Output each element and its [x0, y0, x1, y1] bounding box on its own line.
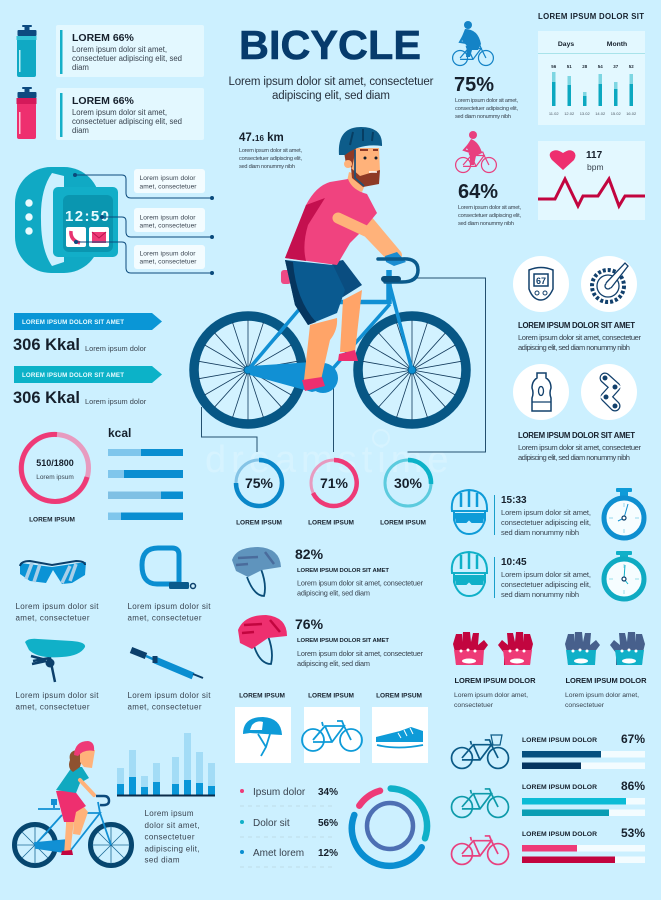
row: cruiser bike 86 percent: 86% [621, 779, 645, 793]
bike frame [248, 270, 412, 374]
distance stat [239, 132, 302, 170]
icon: rider face blue [452, 490, 487, 534]
callout 1: amet, consectetuer [140, 184, 197, 190]
row: road bike 53 percent [452, 826, 645, 864]
card: lorem 66 second: LOREM 66% [72, 95, 135, 107]
callout 2: amet, consectetuer [140, 222, 197, 230]
icon: stopwatch teal [604, 551, 644, 599]
rider stat 10:45: sed diam nonummy nibh [501, 590, 579, 599]
icon: teal bike [452, 789, 508, 817]
stat: blue cyclist 75 percent: sed diam nonummy nibh [455, 114, 511, 120]
icon: bike computer: 67 [536, 276, 546, 286]
panel: bar chart days month: 14.02 [595, 111, 606, 116]
callout 3 [134, 245, 205, 269]
panel: bar chart days month: 54 [598, 64, 603, 69]
front leg [304, 318, 337, 380]
stat: pink cyclist 64 percent: Lorem ipsum dolor sit amet, [458, 205, 521, 211]
helmet [339, 127, 382, 155]
glove [385, 252, 406, 266]
kcal bars [108, 426, 183, 520]
card: lorem 66: consectetuer adipiscing elit, sed [72, 54, 182, 63]
progress ring: 75 percent: 75% [245, 475, 274, 491]
skirt [56, 790, 86, 822]
gloves: teal: consectetuer [565, 702, 605, 709]
callout dots [73, 173, 214, 275]
bar chart description: consectetuer [144, 832, 195, 842]
callout 3: Lorem ipsum dolor [140, 250, 196, 258]
icon: teal gloves [565, 632, 645, 665]
bar chart description [144, 809, 200, 864]
item: bike pump: amet, consectetuer [128, 702, 202, 712]
item: bike pump [128, 650, 211, 712]
legend: Amet lorem [253, 848, 304, 859]
stat: 306 kkal second: Lorem ipsum dolor [85, 397, 147, 406]
stat: 306 kkal: 306 Kkal [13, 336, 80, 354]
icon: bottle outline [513, 364, 569, 420]
panel: teal bottle stat [16, 25, 204, 77]
gloves: teal: LOREM IPSUM DOLOR [566, 676, 647, 685]
donut label: LOREM IPSUM [29, 516, 75, 524]
back arm [366, 218, 397, 255]
panel: bar chart days month: 37 [613, 64, 619, 69]
bar chart description: Lorem ipsum [144, 809, 194, 818]
gear tiles labels: LOREM IPSUM [376, 692, 422, 700]
icon: bike chain [581, 364, 637, 420]
stat: pink helmet 76 percent [238, 615, 424, 668]
icon: rider face teal [452, 552, 487, 596]
stat: blue helmet 82 percent: Lorem ipsum dolor sit amet, consectetuer [297, 578, 424, 588]
stat: 306 kkal second: 306 Kkal [13, 389, 80, 407]
subtitle [228, 76, 434, 102]
head [344, 148, 380, 187]
stat: pink helmet 76 percent: Lorem ipsum dolor sit amet, consectetuer [297, 649, 424, 658]
card: lorem 66: Lorem ipsum dolor sit amet, [72, 45, 167, 54]
description: Lorem ipsum dolor sit amet, consectetuer [518, 443, 641, 452]
card: lorem 66 second: Lorem ipsum dolor sit amet, [72, 108, 167, 117]
tile: shoe [372, 707, 428, 763]
card: lorem 66: LOREM 66% [72, 32, 135, 44]
ring labels: LOREM IPSUM [308, 520, 354, 526]
panel: bar chart days month: 56 [551, 64, 557, 69]
rider stat 10:45: consectetuer adipiscing elit, [501, 580, 591, 589]
front arm [338, 218, 393, 258]
distance stat: sed diam nonummy nibh [239, 164, 295, 170]
small bar chart [117, 733, 215, 796]
ring labels: LOREM IPSUM [380, 520, 426, 526]
face [80, 750, 95, 768]
bar chart description: sed diam [144, 856, 180, 864]
gloves: pink: LOREM IPSUM DOLOR [454, 676, 536, 685]
chainring [308, 363, 338, 393]
rider stat 10:45: Lorem ipsum dolor sit amet, [501, 570, 591, 579]
row: cruiser bike 86 percent: LOREM IPSUM DOLOR [522, 784, 597, 791]
card: lorem 66 second [56, 88, 204, 140]
icon: chainring crank [581, 256, 637, 312]
stat: pink helmet 76 percent: LOREM IPSUM DOLOR SIT AMET [297, 638, 389, 644]
stat: pink cyclist 64 percent: 64% [458, 181, 498, 203]
panel: bar chart days month: 13.02 [580, 111, 590, 116]
description: adipiscing elit, sed diam nonummy nibh [518, 453, 630, 462]
icon: pink cyclist [456, 131, 496, 172]
donut: 510 of 1800: Lorem ipsum [36, 474, 74, 481]
main illustration: cyclist on bicycle [194, 127, 486, 452]
callout 2 [134, 208, 205, 232]
saddle [281, 270, 291, 284]
icon: bike pump [131, 650, 203, 678]
handlebar [96, 796, 109, 805]
gear tiles labels: LOREM IPSUM [239, 692, 285, 700]
bar chart description: adipiscing elit, [144, 844, 200, 854]
icon: bike lock [142, 548, 196, 589]
front wheel [358, 316, 466, 424]
multi-ring donut chart [352, 788, 427, 866]
stat: pink helmet 76 percent: adipiscing elit, sed diam [297, 659, 370, 668]
shirt [285, 179, 377, 265]
row: basket bike 67 percent [452, 732, 645, 769]
ring labels: LOREM IPSUM [236, 520, 282, 526]
title: BICYCLE [239, 22, 421, 68]
row: cruiser bike 86 percent [452, 779, 645, 817]
progress ring: 75 percent [236, 460, 282, 506]
arm [80, 780, 94, 795]
chainstay [250, 362, 320, 392]
panel: heart rate: bpm [587, 162, 604, 172]
stat: blue helmet 82 percent: LOREM IPSUM DOLOR SIT AMET [297, 568, 389, 574]
handlebar [378, 259, 418, 282]
stat: blue helmet 82 percent [232, 546, 424, 598]
banner: blue [14, 313, 162, 330]
wheels [14, 824, 132, 866]
icon: navy bike [452, 735, 508, 768]
row: basket bike 67 percent: 67% [621, 732, 645, 746]
legend: Ipsum dolor [253, 787, 306, 798]
gloves: pink: Lorem ipsum dolor amet, [454, 692, 528, 699]
item: sunglasses: Lorem ipsum dolor sit [16, 602, 99, 611]
item: saddle: Lorem ipsum dolor sit [16, 691, 99, 700]
heading: LOREM IPSUM DOLOR SIT AMET [518, 431, 635, 440]
heading: LOREM IPSUM DOLOR SIT AMET [518, 321, 635, 330]
legend [240, 787, 338, 867]
chart heading: LOREM IPSUM DOLOR SIT [538, 12, 644, 21]
icon: pink bottle [16, 87, 36, 139]
stat: pink cyclist 64 percent: consectetuer adipiscing elit, [458, 213, 521, 219]
legend: 56% [318, 818, 338, 829]
hair [69, 750, 84, 772]
progress ring: 30 percent [385, 460, 431, 506]
icon: pink gloves [453, 632, 533, 665]
ring labels [236, 520, 426, 526]
distance stat: consectetuer adipiscing elit, [239, 156, 302, 162]
panel: pink bottle stat [16, 87, 204, 140]
rider stat 15:33: consectetuer adipiscing elit, [501, 518, 591, 527]
subtitle: Lorem ipsum dolor sit amet, consectetuer [228, 76, 434, 88]
icon: teal bottle [16, 25, 36, 77]
progress ring: 71 percent [311, 460, 357, 506]
panel: bar chart days month: Days [558, 41, 574, 48]
description [518, 443, 641, 462]
banner: blue: LOREM IPSUM DOLOR SIT AMET [22, 319, 124, 326]
shorts [285, 260, 362, 325]
rear wheel [194, 316, 302, 424]
stat: 306 kkal [13, 336, 147, 354]
icon: pink helmet [238, 615, 287, 664]
rack and saddle [51, 799, 57, 805]
icon: blue cyclist [453, 21, 493, 65]
callout 1: Lorem ipsum dolor [140, 175, 196, 182]
rider stat 10:45 [452, 552, 591, 599]
icon: sunglasses [20, 561, 86, 584]
icon: saddle [25, 639, 85, 682]
card: lorem 66 [56, 25, 204, 77]
panel: bar chart days month: 51 [567, 64, 572, 69]
card: lorem 66 second: diam [72, 126, 89, 135]
panel: bar chart days month: 12.02 [564, 111, 575, 116]
item: bike pump: Lorem ipsum dolor sit [128, 691, 211, 700]
gloves: teal [565, 632, 647, 709]
panel: bar chart days month: 16.02 [626, 111, 637, 116]
tile: helmet [235, 707, 291, 763]
stat: blue cyclist 75 percent: 75% [454, 74, 494, 96]
connector lines [202, 278, 486, 452]
card: lorem 66: diam [72, 63, 89, 72]
rider stat 15:33: 15:33 [501, 495, 527, 506]
distance stat: Lorem ipsum dolor sit amet, [239, 148, 302, 154]
stat: 306 kkal: Lorem ipsum dolor [85, 344, 147, 353]
callout lines [75, 175, 212, 273]
description: Lorem ipsum dolor sit amet, consectetuer [518, 333, 641, 342]
gear tiles labels: LOREM IPSUM [308, 692, 354, 700]
card: lorem 66 second: consectetuer adipiscing elit, sed [72, 117, 182, 126]
panel: bar chart days month: 52 [629, 64, 634, 69]
heart rate line [538, 179, 645, 206]
panel: bar chart days month [538, 31, 645, 125]
legend: Dolor sit [253, 818, 290, 829]
callout 1 [134, 169, 205, 193]
rider stat 15:33 [452, 490, 591, 537]
item: bike lock: amet, consectetuer [128, 614, 202, 622]
back leg [340, 290, 362, 352]
icon: pink bike [452, 836, 508, 864]
illustration: woman cyclist [14, 741, 132, 866]
top [56, 767, 89, 793]
shoes [61, 850, 73, 855]
progress ring: 71 percent: 71% [320, 475, 349, 491]
kcal bars: kcal [108, 426, 131, 440]
panel: bar chart days month: 11.02 [549, 111, 559, 116]
watermark: dreamstime [205, 439, 450, 481]
stat: pink helmet 76 percent: 76% [295, 616, 324, 632]
tile: bicycle [302, 707, 362, 763]
subtitle: adipiscing elit, sed diam [272, 90, 390, 102]
legend: 34% [318, 787, 338, 798]
stat: blue cyclist 75 percent [453, 21, 518, 120]
icon circles group one [513, 256, 641, 352]
row: road bike 53 percent: LOREM IPSUM DOLOR [522, 831, 597, 838]
icon: blue helmet [232, 547, 281, 596]
stat: blue helmet 82 percent: adipiscing elit, sed diam [297, 588, 370, 598]
icon: smartwatch [15, 167, 118, 273]
front shoe [302, 377, 325, 391]
legs [64, 807, 88, 855]
stat: pink cyclist 64 percent: sed diam nonummy nibh [458, 221, 514, 227]
gloves: teal: Lorem ipsum dolor amet, [565, 692, 639, 699]
donut: 510 of 1800: 510/1800 [36, 458, 74, 468]
panel: bar chart days month: 28 [582, 64, 588, 69]
frame [35, 800, 111, 853]
item: sunglasses: amet, consectetuer [16, 614, 90, 622]
stat: blue cyclist 75 percent: Lorem ipsum dolor sit amet, [455, 98, 518, 104]
row: basket bike 67 percent: LOREM IPSUM DOLOR [522, 737, 597, 744]
rider stat 15:33: Lorem ipsum dolor sit amet, [501, 508, 591, 517]
gloves: pink [453, 632, 536, 709]
stat: 306 kkal second [13, 389, 147, 407]
stat: pink cyclist 64 percent [456, 131, 521, 227]
gear tiles labels [239, 692, 422, 700]
item: saddle [16, 639, 99, 712]
icon: stopwatch blue [604, 488, 644, 538]
helmet [74, 741, 94, 756]
distance stat: 47.16 km [239, 132, 284, 144]
row: road bike 53 percent: 53% [621, 826, 645, 840]
donut: 510 of 1800 [21, 434, 88, 502]
icon: smartwatch: 12:50 [65, 208, 109, 225]
item: bike lock [128, 548, 211, 622]
legend: 12% [318, 848, 338, 859]
progress ring: 30 percent: 30% [394, 475, 423, 491]
callout 2: Lorem ipsum dolor [140, 214, 196, 222]
bar chart description: dolor sit amet, [144, 821, 200, 830]
rider stat 15:33: sed diam nonummy nibh [501, 528, 579, 537]
panel: bar chart days month: Month [607, 41, 627, 48]
stat: blue helmet 82 percent: 82% [295, 546, 324, 562]
smartwatch panel [15, 167, 214, 275]
panel: heart rate [538, 141, 645, 220]
neck [346, 172, 368, 192]
banner: teal [14, 366, 162, 383]
panel: heart rate: 117 [586, 150, 603, 161]
callout 3: amet, consectetuer [140, 258, 197, 266]
gloves: pink: consectetuer [454, 702, 494, 709]
icon circles group two [513, 364, 641, 462]
description [518, 333, 641, 352]
item: saddle: amet, consectetuer [16, 702, 90, 712]
banner: teal: LOREM IPSUM DOLOR SIT AMET [22, 372, 124, 379]
rider stat 10:45: 10:45 [501, 557, 527, 568]
back shoe [338, 350, 358, 361]
panel: bar chart days month: 15.02 [611, 111, 621, 116]
stat: blue cyclist 75 percent: consectetuer adipiscing elit, [455, 106, 518, 112]
icon: heart [550, 150, 576, 170]
description: adipiscing elit, sed diam nonummy nibh [518, 343, 630, 352]
item: sunglasses [16, 561, 99, 622]
item: bike lock: Lorem ipsum dolor sit [128, 602, 211, 611]
